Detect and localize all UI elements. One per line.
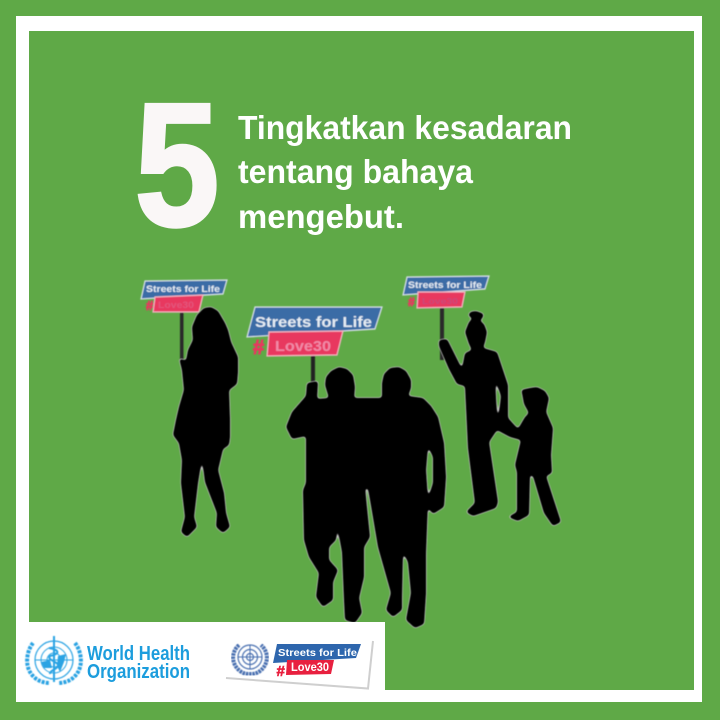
sign: right: Love30 bbox=[422, 297, 459, 306]
sign: left bbox=[141, 280, 227, 361]
icon: UN emblem bbox=[233, 645, 267, 674]
WHO wordmark bbox=[87, 642, 190, 683]
heading bbox=[238, 109, 572, 235]
campaign banner: Streets for Life bbox=[278, 647, 357, 659]
WHO wordmark: World Health bbox=[87, 642, 190, 665]
heading: mengebut. bbox=[238, 198, 404, 235]
silhouette: adult and child bbox=[439, 311, 561, 526]
sign: left: Love30 bbox=[158, 300, 194, 310]
sign: middle: Streets for Life bbox=[255, 314, 372, 331]
sign: middle: # bbox=[253, 337, 264, 359]
campaign banner: # bbox=[276, 663, 286, 680]
icon: WHO emblem bbox=[27, 636, 81, 683]
sign: middle: Love30 bbox=[275, 338, 331, 355]
campaign banner: Love30 bbox=[291, 662, 329, 674]
sign: right: # bbox=[408, 295, 415, 309]
silhouette: woman bbox=[173, 307, 238, 537]
sign: left: Streets for Life bbox=[146, 284, 220, 295]
sign: left: # bbox=[146, 298, 154, 313]
logo panel bbox=[16, 622, 385, 702]
heading: tentang bahaya bbox=[238, 153, 474, 190]
sign: right: Streets for Life bbox=[408, 280, 482, 291]
number 5: 5 bbox=[134, 67, 220, 263]
campaign banner bbox=[273, 644, 361, 680]
sign: right bbox=[403, 276, 489, 360]
sign: middle bbox=[247, 307, 382, 388]
paper shadow bbox=[226, 641, 373, 688]
WHO wordmark: Organization bbox=[87, 660, 190, 683]
silhouette: two men bbox=[286, 367, 446, 628]
heading: Tingkatkan kesadaran bbox=[238, 109, 572, 146]
